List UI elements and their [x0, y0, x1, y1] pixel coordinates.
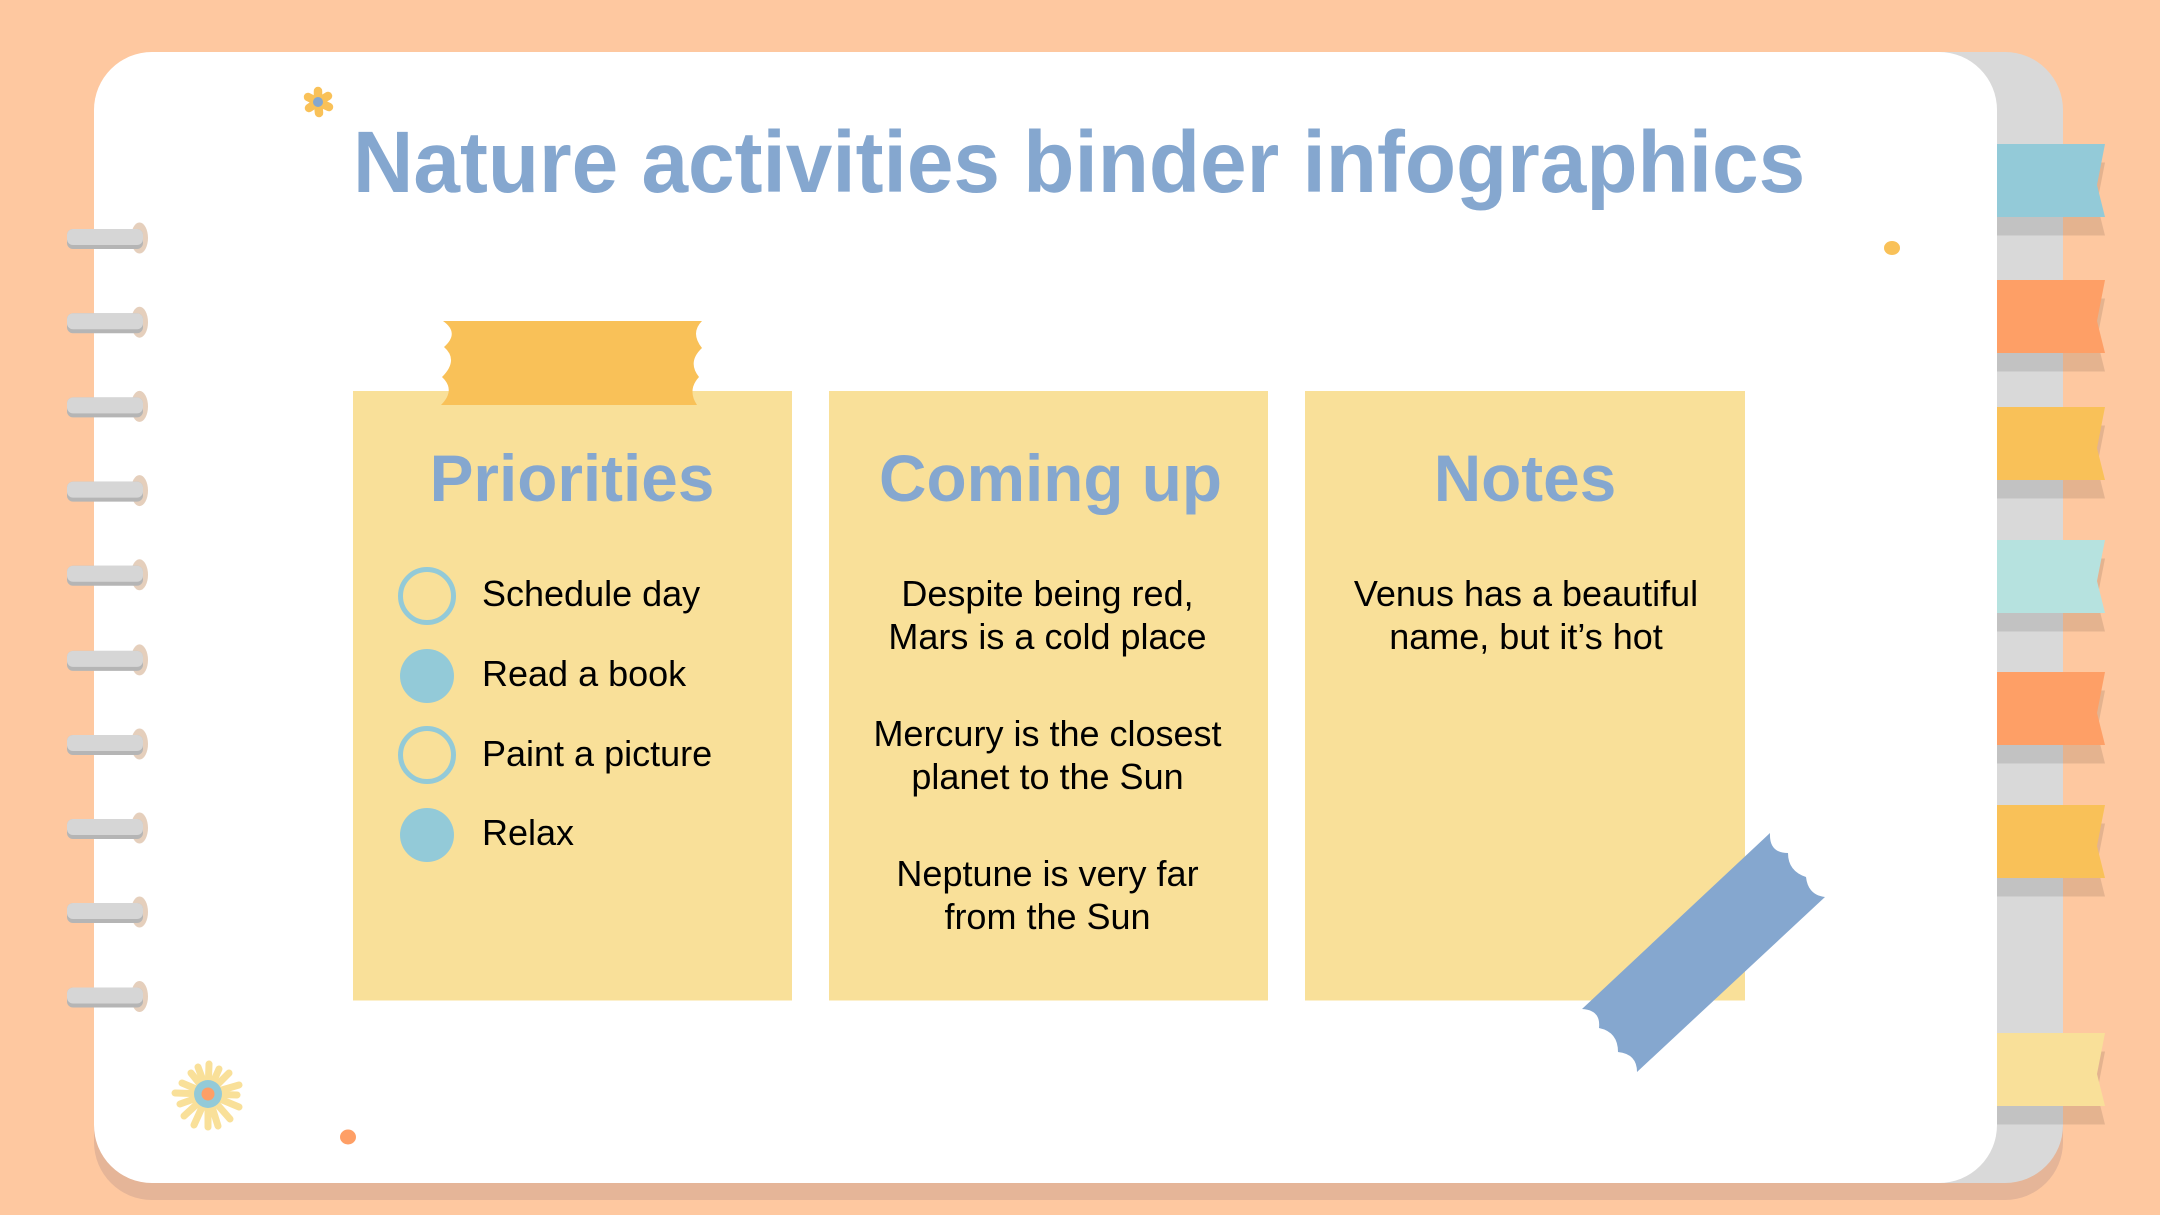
text: Read a book: Read a book: [482, 653, 687, 694]
tab: light teal: [1997, 540, 2105, 632]
text: Mercury: Mercury is the closest: [873, 713, 1222, 754]
panel: priorities: [353, 391, 792, 1000]
text: Schedule day: Schedule day: [482, 573, 700, 614]
text: Neptune: Neptune is very far: [896, 853, 1199, 894]
text: Mars: Mars is a cold place: [888, 616, 1207, 657]
title: Nature activities binder infographics: [353, 115, 1805, 211]
icon: sunflower: [175, 1064, 239, 1127]
tab: teal: [1997, 144, 2105, 236]
card background: [829, 391, 1268, 1000]
binder back page: [1800, 52, 2063, 1183]
text: Mars: Despite being red,: [901, 573, 1194, 614]
icon: empty circle: [400, 570, 454, 622]
text: Mercury: planet to the Sun: [911, 756, 1184, 797]
panel: notes: [1305, 391, 1745, 1000]
heading: Notes: Notes: [1434, 442, 1616, 515]
text: Relax: Relax: [482, 812, 574, 853]
text: Venus: Venus has a beautiful: [1354, 573, 1698, 614]
tab: orange: [1997, 280, 2105, 372]
text: Venus: name, but it’s hot: [1389, 616, 1663, 657]
panel: coming up: [829, 391, 1268, 1000]
heading: Priorities: Priorities: [430, 442, 714, 515]
dot: orange: [340, 1130, 356, 1144]
tab: yellow: [1997, 407, 2105, 498]
icon: empty circle: [400, 728, 454, 782]
icon: filled circle: [400, 649, 454, 703]
heading: Coming up: Coming up: [879, 442, 1222, 515]
card background: [1305, 391, 1745, 1000]
text: Neptune: from the Sun: [944, 896, 1151, 937]
icon: small flower: [308, 91, 329, 113]
icon: filled circle: [400, 808, 454, 862]
card background: [353, 391, 792, 1000]
tape: blue: [1582, 833, 1825, 1072]
tab: orange: [1997, 672, 2105, 764]
binder rings: [67, 222, 148, 1012]
tab: cream: [1997, 1033, 2105, 1124]
dot: yellow: [1884, 241, 1900, 255]
tape: yellow: [441, 321, 702, 405]
text: Paint a picture: Paint a picture: [482, 733, 712, 774]
tab: yellow: [1997, 805, 2105, 896]
